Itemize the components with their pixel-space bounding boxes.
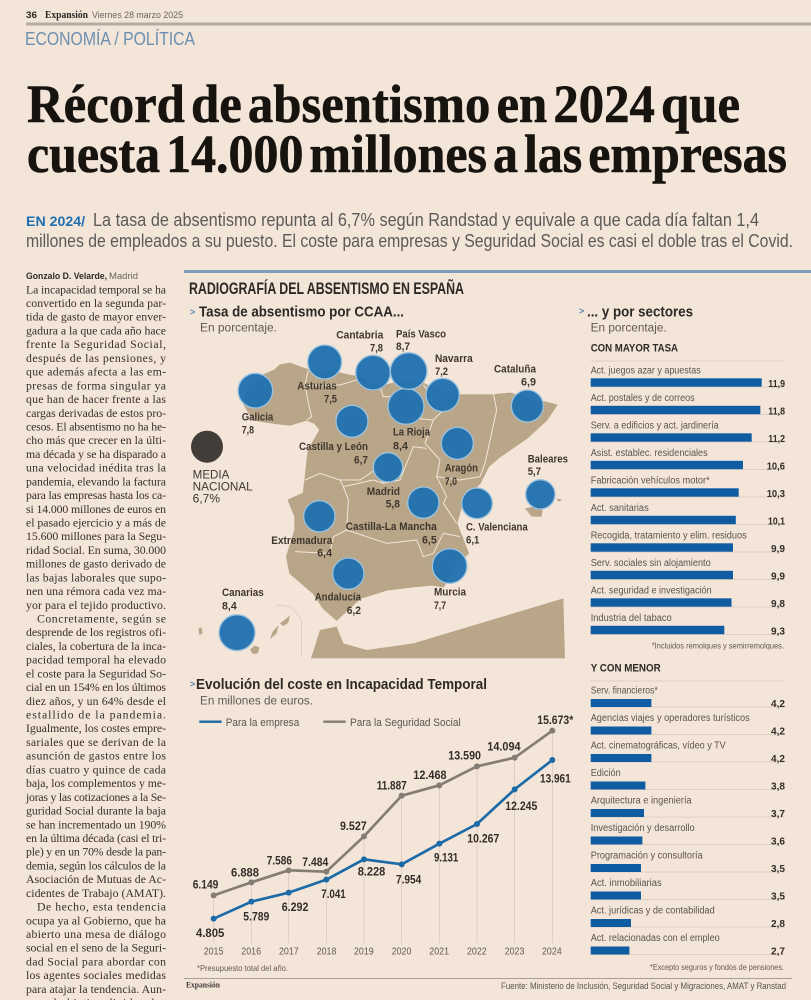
- chart year axis: 2017: [279, 945, 299, 957]
- article body text: ple) y en un 70% desde la pan-: [26, 845, 166, 859]
- chart values: 4.805: [196, 928, 225, 940]
- bar chart: highest rates: Act. sanitarias: [591, 503, 649, 514]
- map labels: 6,7: [354, 454, 368, 466]
- map labels: La Rioja: [393, 427, 431, 439]
- page header: 36: [26, 10, 37, 21]
- bar chart: highest rates: Fabricación vehículos motor*: [591, 476, 710, 487]
- map labels: 7,8: [242, 424, 254, 436]
- article body text: días cuatro y quince de cada: [26, 762, 167, 776]
- article body text: ocupa ya al Gobierno, que ha: [26, 913, 167, 927]
- circle: C. Valenciana: [462, 488, 492, 519]
- article body text: el coste para la Seguridad So-: [26, 666, 166, 680]
- bar chart: highest rates: 10,1: [768, 516, 785, 528]
- map labels: 8,7: [396, 341, 410, 353]
- national average label: NACIONAL: [193, 482, 253, 494]
- bar chart: lowest rates: 4,2: [771, 753, 785, 765]
- bar chart: highest rates: Serv. sociales sin alojamiento: [591, 558, 711, 569]
- article body text: De hecho, esta tendencia: [37, 900, 167, 914]
- article body text: pacidad temporal ha elevado: [26, 653, 166, 667]
- article body text: tida de gasto de mayor enver-: [26, 310, 166, 324]
- article body text: desprende de los registros ofi-: [26, 625, 166, 639]
- circle: Madrid: [373, 453, 403, 482]
- bar chart: highest rates: Act. seguridad e investigación: [591, 586, 712, 597]
- chart year axis: 2021: [429, 945, 449, 957]
- chart values: 12.245: [505, 801, 538, 813]
- bar chart: lowest rates: Act. jurídicas y de contabilidad: [591, 905, 715, 916]
- chart values: 15.673*: [537, 715, 574, 727]
- circle: Canarias: [219, 615, 255, 651]
- bar chart: lowest rates: [591, 681, 785, 958]
- article body text: sariales que se derivan de la: [26, 735, 167, 749]
- article body text: dad Social para abordar con: [26, 954, 166, 968]
- article body text: cho más que crecer en la últi-: [26, 433, 166, 447]
- article body text: presas de forma singular ya: [26, 378, 167, 392]
- article body text: [25, 282, 167, 1000]
- article byline: Gonzalo D. Velarde,: [26, 271, 107, 282]
- national average label: MEDIA: [193, 469, 230, 481]
- Canary inset line: [277, 605, 302, 657]
- bar chart: lowest rates: Edición: [591, 768, 621, 779]
- bar chart: highest rates: 11,2: [768, 433, 785, 445]
- chart values: 7.041: [321, 889, 346, 901]
- article body text: para atajar la tendencia. Aun-: [26, 982, 166, 996]
- bar chart: lowest rates: 2,7: [771, 946, 785, 958]
- map labels: 7,0: [445, 476, 457, 488]
- article body text: yor para el tejido productivo.: [26, 598, 166, 612]
- article body text: Concretamente, según se: [37, 612, 166, 626]
- bar chart: lowest rates: 3,5: [771, 863, 785, 875]
- page header: Viernes 28 marzo 2025: [92, 10, 183, 21]
- chart values: 7.954: [396, 874, 422, 886]
- bar chart: lowest rates: Arquitectura e ingeniería: [591, 795, 692, 806]
- map labels: Castilla-La Mancha: [346, 521, 438, 533]
- bar chart: lowest rates: 2,8: [771, 918, 785, 930]
- bar chart: highest rates: 9,9: [771, 570, 785, 582]
- bar chart: lowest rates: 3,5: [771, 890, 785, 902]
- sectors panel heading: ... y por sectores: [587, 304, 693, 321]
- circle: País Vasco: [390, 353, 427, 389]
- article body text: las bajas laborales que supo-: [26, 570, 166, 584]
- drop lines: [214, 731, 552, 943]
- map panel heading: Tasa de absentismo por CCAA...: [199, 304, 404, 320]
- map labels: C. Valenciana: [466, 522, 528, 534]
- chart footnote: *Presupuesto total del año.: [197, 964, 288, 973]
- national average label: [193, 469, 253, 505]
- page header: [26, 10, 811, 26]
- article body text: se han incrementado un 190%: [26, 817, 166, 831]
- map labels: Andalucía: [315, 592, 362, 604]
- map labels: [222, 328, 568, 617]
- map labels: 6,9: [521, 376, 536, 388]
- chart values: 10.267: [467, 833, 499, 845]
- article body text: Igualmente, los costes empre-: [26, 721, 166, 735]
- chart values: 11.887: [377, 781, 407, 793]
- chart values: 9.527: [340, 821, 367, 833]
- circle: Galicia: [238, 373, 273, 408]
- article body text: Asociación de Mutuas de Ac-: [26, 872, 166, 886]
- map labels: 8,4: [393, 440, 409, 452]
- circle: Baleares: [526, 480, 555, 509]
- article body text: frente la Seguridad Social,: [26, 337, 166, 351]
- bar chart: lowest rates: 3,6: [771, 836, 785, 848]
- map labels: 6,2: [347, 605, 361, 617]
- article body text: una velocidad inédita tras la: [26, 461, 167, 475]
- article body text: estallido de la pandemia.: [26, 708, 166, 722]
- map panel heading: >: [190, 307, 195, 317]
- Canary islands: [198, 616, 290, 654]
- article body text: el pasado ejercicio y a más de: [26, 516, 166, 530]
- line chart heading: En millones de euros.: [200, 695, 313, 707]
- lowest rates footnote: *Excepto seguros y fondos de pensiones.: [650, 963, 784, 972]
- map labels: Cataluña: [494, 363, 537, 375]
- circle: Castilla y León: [336, 405, 368, 437]
- bar chart: highest rates: Serv. a edificios y act. jardinería: [591, 421, 719, 432]
- chart values: 5.789: [243, 912, 269, 924]
- title: [27, 74, 787, 184]
- chart values: 7.586: [267, 855, 292, 867]
- article body text: ridad Social. En suma, 30.000: [26, 543, 166, 557]
- series: empresa: [211, 757, 555, 922]
- bar chart: lowest rates: Programación y consultoría: [591, 850, 703, 861]
- article body text: los agentes sociales medidas: [26, 968, 166, 982]
- bar chart: highest rates: Act. juegos azar y apuestas: [591, 366, 701, 377]
- chart year axis: 2022: [467, 945, 487, 957]
- chart values: 9.131: [434, 853, 459, 865]
- circle: Aragón: [441, 427, 473, 459]
- map labels: 7,7: [434, 600, 446, 612]
- highest rates footnote: *Incluidos remolques y semirremolques.: [652, 641, 784, 650]
- article body text: cesos. El absentismo no ha he-: [26, 420, 166, 434]
- chart values: 6.292: [282, 902, 308, 914]
- bar chart: highest rates: 11,9: [768, 378, 785, 390]
- bar chart: highest rates: 9,9: [771, 543, 785, 555]
- article body text: si 14.000 millones de euros en: [26, 502, 166, 516]
- map labels: Murcia: [434, 587, 467, 599]
- article body text: después de las pensiones, y: [26, 351, 166, 365]
- bar chart: highest rates: 10,6: [767, 460, 785, 472]
- chart legend: Para la empresa: [226, 717, 300, 729]
- chart legend: [199, 717, 461, 729]
- article body text: convertido en la segunda par-: [26, 296, 166, 310]
- bar chart: lowest rates: Act. cinematográficas, vídeo y TV: [591, 740, 726, 751]
- map labels: Galicia: [242, 412, 274, 424]
- chart year axis: 2015: [204, 945, 224, 957]
- peninsula: [243, 363, 557, 620]
- page header: Expansión: [45, 10, 88, 21]
- article body text: demia, según los cálculos de la: [26, 858, 167, 872]
- article body text: joras y las cotizaciones a la Se-: [25, 790, 166, 804]
- article body text: abierto una mesa de diálogo: [26, 927, 166, 941]
- chart values: 13.590: [448, 750, 481, 762]
- sectors panel heading: >: [579, 306, 584, 316]
- map labels: País Vasco: [396, 328, 446, 340]
- chart values: 6.149: [193, 879, 218, 891]
- bar chart: highest rates: 9,8: [771, 598, 785, 610]
- chart legend: Para la Seguridad Social: [350, 717, 461, 729]
- map labels: Asturias: [297, 380, 337, 392]
- map labels: 7,8: [370, 343, 383, 355]
- section label: ECONOMÍA / POLÍTICA: [25, 29, 195, 49]
- circle: Asturias: [308, 345, 342, 379]
- article body text: ma década y se ha disparado a: [26, 447, 167, 461]
- lowest rates subheading: Y CON MENOR: [591, 663, 661, 675]
- article body text: nen una rémora cada vez ma-: [26, 584, 166, 598]
- bar chart: lowest rates: 4,2: [771, 726, 785, 738]
- article body text: gadura a la que cada año hace: [26, 324, 166, 338]
- article body text: cidentes de Trabajo (AMAT).: [26, 886, 166, 900]
- credits footer: Expansión: [186, 980, 220, 990]
- bar chart: lowest rates: Investigación y desarrollo: [591, 823, 695, 834]
- circle: Murcia: [432, 549, 467, 583]
- infographic top rule: [184, 270, 811, 273]
- national average label: 6,7%: [193, 493, 220, 505]
- map labels: 7,2: [435, 366, 448, 378]
- chart year axis: 2018: [317, 945, 337, 957]
- bar chart: lowest rates: 3,8: [771, 780, 785, 792]
- bar chart: highest rates: Recogida, tratamiento y elim. residuos: [591, 531, 747, 542]
- bar chart: highest rates: 10,3: [767, 488, 785, 500]
- credits footer: [184, 978, 792, 991]
- map labels: 6,5: [422, 534, 437, 546]
- circle: La Rioja: [388, 388, 424, 424]
- map labels: 6,4: [317, 548, 333, 560]
- map labels: 6,1: [466, 534, 479, 546]
- chart year axis: 2020: [392, 945, 412, 957]
- circle: Navarra: [426, 378, 459, 412]
- map labels: 5,8: [386, 498, 400, 510]
- deck: [26, 210, 793, 251]
- map labels: 7,5: [324, 394, 337, 406]
- region borders: [295, 370, 497, 557]
- chart values: 8.228: [358, 867, 386, 879]
- article body text: asunción de gastos entre los: [26, 749, 166, 763]
- map of Spain: [198, 363, 565, 658]
- deck: EN 2024/: [26, 213, 85, 229]
- chart values: 12.468: [413, 770, 447, 782]
- map panel heading: En porcentaje.: [200, 322, 277, 334]
- chart year axis: 2016: [241, 945, 261, 957]
- bar chart: highest rates: [591, 361, 785, 638]
- bar chart: lowest rates: 3,7: [771, 808, 785, 820]
- bar chart: lowest rates: 4,2: [771, 698, 785, 710]
- deck: La tasa de absentismo repunta al 6,7% según Randstad y equivale a que cada día faltan 1,4: [93, 210, 759, 230]
- map labels: Canarias: [222, 587, 264, 599]
- chart values: 6.888: [231, 867, 260, 879]
- article body text: cargas derivadas de estos pro-: [26, 406, 166, 420]
- article body text: social en el seno de la Seguri-: [26, 941, 166, 955]
- article body text: diez años, y un 64% desde el: [26, 694, 167, 708]
- series: Seguridad Social: [211, 728, 555, 898]
- bar chart: lowest rates: Act. inmobiliarias: [591, 878, 662, 889]
- map labels: Cantabria: [336, 329, 384, 341]
- chart year axis: 2024: [542, 945, 562, 957]
- map labels: Navarra: [435, 353, 474, 365]
- map labels: Extremadura: [271, 535, 333, 547]
- article body text: 15.600 millones para la Segu-: [26, 529, 166, 543]
- map labels: Aragón: [445, 463, 478, 475]
- chart year axis: 2019: [354, 945, 374, 957]
- article body text: baja, los complementos y me-: [26, 776, 166, 790]
- article body text: millones de gasto derivado de: [26, 557, 166, 571]
- bar chart: highest rates: Industria del tabaco: [591, 613, 672, 624]
- article body text: para las empresas hasta los ca-: [26, 488, 166, 502]
- article body text: que además afecta a las em-: [26, 365, 166, 379]
- bar chart: lowest rates: Agencias viajes y operadores turísticos: [591, 713, 750, 724]
- bar chart: highest rates: 9,3: [771, 626, 785, 638]
- bar chart: lowest rates: Serv. financieros*: [591, 685, 658, 696]
- chart values: 7.484: [302, 857, 329, 869]
- bar chart: highest rates: Asist. establec. residenciales: [591, 448, 708, 459]
- article body text: La incapacidad temporal se ha: [26, 282, 167, 296]
- infographic heading: RADIOGRAFÍA DEL ABSENTISMO EN ESPAÑA: [189, 278, 464, 298]
- article byline: Madrid: [109, 271, 138, 282]
- circle: Castilla-La Mancha: [408, 487, 439, 518]
- Africa coast: [311, 598, 565, 658]
- chart year axis: 2023: [505, 945, 525, 957]
- bar chart: lowest rates: Act. relacionadas con el empleo: [591, 933, 720, 944]
- line chart heading: >: [190, 679, 195, 689]
- circle: Cataluña: [511, 390, 543, 422]
- bar chart: highest rates: 11,8: [768, 406, 785, 418]
- map labels: Baleares: [528, 454, 568, 466]
- national average marker: [191, 431, 223, 463]
- chart values: [193, 715, 574, 940]
- chart values: 13.961: [540, 774, 571, 786]
- article body text: que han de hacer frente a las: [26, 392, 166, 406]
- map labels: Castilla y León: [299, 441, 368, 453]
- line chart heading: [190, 676, 487, 707]
- article body text: guridad Social durante la baja: [26, 804, 167, 818]
- map panel heading: [190, 304, 404, 334]
- article body text: pandemia, elevando la factura: [26, 474, 167, 488]
- chart year axis: [204, 945, 562, 957]
- map labels: Madrid: [367, 486, 400, 498]
- article body text: en la última década (casi el tri-: [26, 831, 166, 845]
- bar chart: highest rates: Act. postales y de correos: [591, 393, 695, 404]
- article body text: cial en un 154% en los últimos: [26, 680, 166, 694]
- line chart: [211, 728, 555, 943]
- line chart heading: Evolución del coste en Incapacidad Temporal: [196, 676, 487, 693]
- highest rates subheading: CON MAYOR TASA: [591, 343, 678, 355]
- sectors panel heading: [579, 304, 693, 335]
- sectors panel heading: En porcentaje.: [591, 323, 667, 335]
- title: Récord de absentismo en 2024 que: [27, 74, 740, 134]
- Balearic islands: [525, 498, 563, 517]
- circle: Cantabria: [356, 355, 390, 390]
- article body text: ciales, la cobertura de la inca-: [26, 639, 166, 653]
- map labels: 8,4: [222, 600, 238, 612]
- circle: Andalucía: [333, 558, 364, 589]
- circle: Extremadura: [304, 501, 335, 532]
- map labels: 5,7: [528, 466, 541, 478]
- map data circles: [219, 345, 555, 651]
- chart values: 14.094: [487, 742, 521, 754]
